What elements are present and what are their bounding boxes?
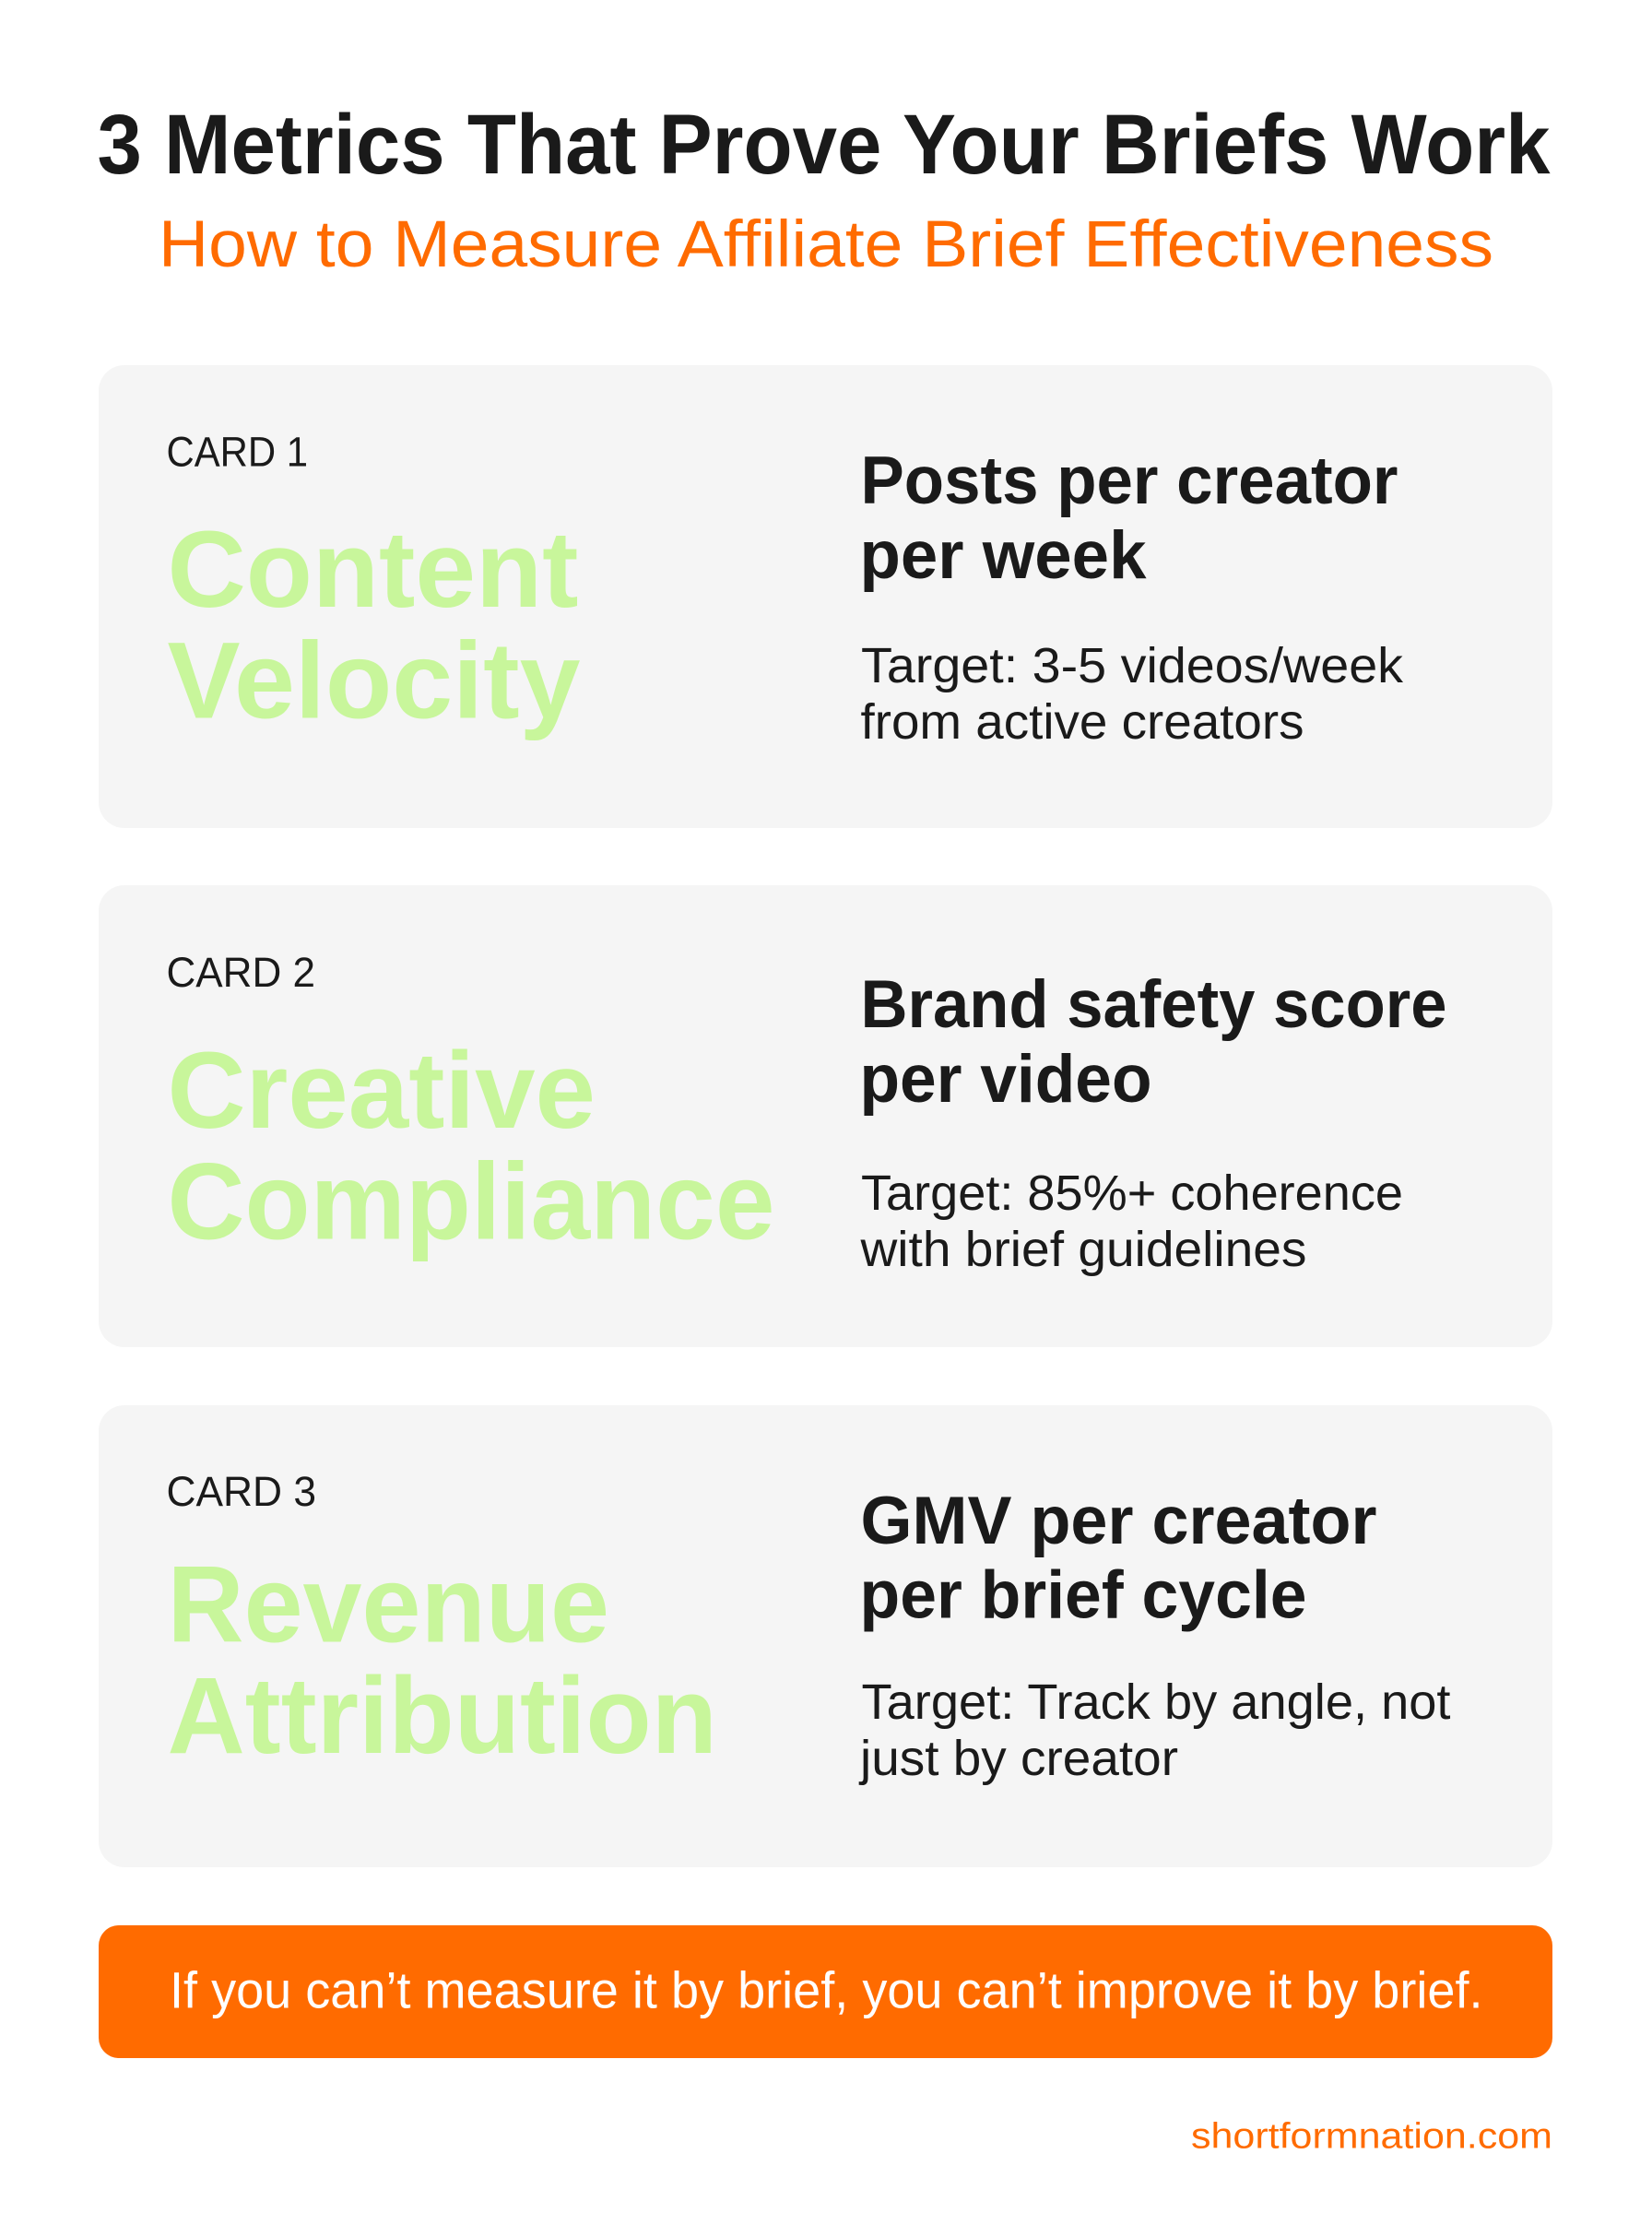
card 3 heading: GMV per creator	[861, 1484, 1377, 1558]
card 1 target: Target: 3-5 videos/week	[861, 638, 1404, 693]
card 1 metric name: Content	[168, 509, 579, 631]
card 2 label: CARD 2	[166, 949, 315, 996]
footer website: shortformnation.com	[1191, 2117, 1552, 2156]
card 3 metric name	[168, 1544, 717, 1777]
card 1 heading: per week	[859, 518, 1147, 593]
card 1 heading: Posts per creator	[861, 444, 1398, 518]
card 2 heading: per video	[859, 1042, 1152, 1117]
card 2 target: with brief guidelines	[859, 1222, 1307, 1277]
card 3 heading: per brief cycle	[859, 1558, 1307, 1632]
card 1 heading	[859, 444, 1398, 593]
panel: card 2 creative compliance	[99, 885, 1552, 1347]
card 3 metric name: Attribution	[168, 1655, 717, 1777]
card 3 target: Target: Track by angle, not	[861, 1675, 1451, 1730]
card 1 metric name	[168, 509, 581, 741]
title: 3 Metrics That Prove Your Briefs Work	[98, 98, 1551, 192]
card 1 target	[861, 638, 1404, 750]
card 3 heading	[859, 1484, 1377, 1632]
card 1 target: from active creators	[861, 694, 1304, 750]
card 2 target: Target: 85%+ coherence	[861, 1166, 1403, 1221]
callout banner	[99, 1925, 1552, 2058]
card 2 background	[99, 885, 1552, 1347]
card 3 background	[99, 1405, 1552, 1867]
card 1 metric name: Velocity	[168, 620, 581, 741]
card 3 target	[858, 1675, 1451, 1786]
card 2 target	[859, 1166, 1403, 1277]
card 1 background	[99, 365, 1552, 828]
card 2 heading	[859, 967, 1447, 1117]
panel: card 1 content velocity	[99, 365, 1552, 828]
panel: card 3 revenue attribution	[99, 1405, 1552, 1867]
card 3 target: just by creator	[858, 1731, 1178, 1786]
callout banner: If you can’t measure it by brief, you can’t improve it by brief.	[170, 1960, 1482, 2019]
card 2 heading: Brand safety score	[861, 967, 1447, 1042]
card 3 label: CARD 3	[166, 1468, 316, 1515]
card 2 metric name: Compliance	[168, 1142, 774, 1263]
card 2 metric name: Creative	[168, 1030, 596, 1152]
subtitle: How to Measure Affiliate Brief Effectiveness	[159, 208, 1493, 281]
card 2 metric name	[168, 1030, 774, 1263]
card 1 label: CARD 1	[166, 428, 308, 476]
card 3 metric name: Revenue	[168, 1544, 609, 1665]
